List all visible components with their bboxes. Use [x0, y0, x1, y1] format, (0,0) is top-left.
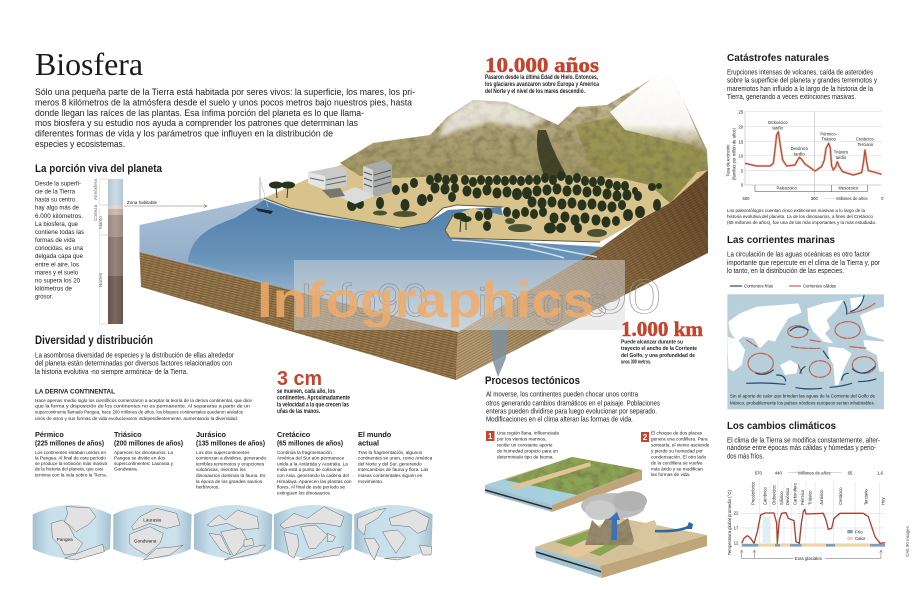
column: Pérmico	[35, 430, 107, 477]
right soil face	[456, 170, 708, 380]
column: Pérmico: de la historia del planeta, que casi	[35, 466, 103, 472]
text block: Al moverse, los continentes pueden chocar unos contra	[486, 390, 638, 399]
panel: diversidad y distribución	[35, 335, 433, 495]
column: Cretácico: unida a la Antártida y Australia. La	[277, 461, 348, 466]
watermark: 90	[594, 271, 661, 324]
deriva text: Hace apenas medio siglo los científicos comenzaron a aceptar la teoría de la deriva continental, que dice	[35, 398, 252, 403]
globe: Triásico: Gondwana	[134, 538, 157, 543]
text block	[486, 390, 660, 423]
chart: global temperature: Devónico	[785, 487, 790, 505]
globe: Triásico	[113, 505, 192, 560]
habitable zone label and arrow	[124, 200, 207, 208]
chart: extinction rate: Terciario	[857, 142, 874, 147]
text block: la historia evolutiva -no siempre armónica- de la Tierra.	[35, 369, 188, 376]
column: Pérmico: la Pangea. Al final de este período	[35, 455, 106, 460]
step 2 text: las formas de vida.	[651, 472, 690, 477]
trees	[347, 171, 662, 237]
chart: global temperature: 17	[734, 525, 739, 530]
chart: extinction rate: Ordovícico	[768, 120, 788, 125]
callout: 10.000 años: 10.000 años	[485, 53, 599, 77]
chart: extinction rate: 10	[739, 153, 744, 158]
chart: global temperature: Silúrico	[779, 491, 784, 505]
chart: extinction rate: Triásico	[834, 150, 849, 155]
chart: global temperature: Cretácico	[838, 487, 843, 505]
globe: actual	[354, 505, 433, 560]
deriva text: que la forma y disposición de los continentes no es permanente. Al separarse a partir de un	[35, 404, 250, 409]
chart: global temperature: Precámbrico	[751, 481, 756, 505]
callout: 10.000 años: los glaciares avanzaron sobre Europa y América	[485, 82, 600, 88]
deriva text: supercontinente llamado Pangea, hace 200 millones de años, los bloques continentales quedaron aislados	[35, 410, 244, 415]
chart: extinction rate: Millones de años	[836, 196, 868, 201]
panel: los cambios climáticos	[727, 420, 886, 561]
column: Cretácico: Himalaya. Aparecen las plantas con	[277, 479, 352, 484]
panel: la porción viva del planeta	[35, 163, 163, 324]
globe: Pérmico: Pangea	[57, 537, 73, 542]
column: Jurásico: dinosaurios dominan la fauna. Es	[196, 473, 266, 478]
chart: extinction rate: 0	[741, 183, 744, 188]
badge 1: 1	[488, 432, 493, 441]
chart: global temperature: Millones de años	[798, 470, 831, 475]
step 2 text: sortearla, el viento asciende	[651, 443, 710, 448]
sea deep	[188, 200, 602, 332]
heading: Los cambios climáticos	[727, 420, 836, 432]
globe: Jurásico	[194, 505, 272, 560]
column: Triásico: supercontinentes: Laurasia y	[114, 461, 174, 466]
column: El mundo actual: El mundo	[358, 430, 392, 439]
chart: extinction rate: 5	[741, 168, 744, 173]
callout: 3 cm	[277, 367, 351, 415]
legend	[730, 284, 837, 290]
text block	[727, 438, 881, 460]
text block: hay algo más de	[35, 205, 79, 212]
chart: global temperature: 12	[734, 541, 739, 546]
text block: La asombrosa diversidad de especies y la distribución de ellas alrededor	[35, 352, 235, 360]
step 1 text: por los vientos marinos,	[497, 436, 547, 441]
step 1 text: Una región llana, influenciada	[497, 431, 559, 436]
chart: global temperature: Terciario	[863, 489, 868, 505]
column: Cretácico: Cretácico	[277, 430, 311, 439]
column: Pérmico: se produce la extinción más masiva	[35, 461, 107, 466]
text block: maremotos han influido a lo largo de la historia de la	[727, 86, 873, 93]
deriva text	[35, 398, 252, 421]
habitable zone label and arrow: Zona habitable	[127, 200, 157, 206]
callout: 3 cm: uñas de las manos.	[277, 409, 320, 415]
column: El mundo actual: Tras la fragmentación, algunos	[358, 450, 423, 455]
badge 1	[486, 431, 494, 441]
globe: Triásico: Laurasia	[143, 518, 162, 523]
text block: Erupciones intensas de volcanes, caída de asteroides	[727, 70, 873, 76]
sailing boat	[255, 177, 273, 214]
footnote: historia evolutiva del planeta. La de los dinosaurios, a fines del Cretácico	[727, 214, 873, 220]
shore foam	[264, 199, 597, 258]
chart: global temperature: Jurásico	[819, 489, 824, 505]
chart: global temperature: Frío	[855, 529, 863, 534]
column: El mundo actual: movimiento.	[358, 479, 383, 484]
intro text	[35, 87, 415, 149]
column: Jurásico: la época de los grandes saurios	[196, 479, 263, 484]
column: Jurásico: terribles terremotos y erupciones	[196, 461, 265, 466]
earth layers column	[93, 179, 123, 324]
front soil face	[140, 252, 458, 380]
mountain	[340, 70, 708, 203]
chart: extinction rate: Paleozoico	[776, 186, 798, 191]
footnote: Los paleontólogos cuentan cinco extinciones masivas a lo largo de la	[727, 208, 865, 214]
callout: 1.000 km	[621, 317, 703, 366]
column: El mundo actual: actual	[358, 438, 379, 448]
globe: Pérmico	[33, 505, 111, 560]
text block: importante que repercute en el clima de la Tierra y, por	[727, 260, 881, 267]
step 2 text	[651, 431, 710, 477]
column: Triásico: (200 millones de años)	[114, 438, 184, 448]
chart: global temperature: Eras glaciales	[795, 556, 822, 561]
diagram: flat land block	[485, 457, 642, 512]
text block: sobre la superficie del planeta y grandes terremotos y	[727, 78, 877, 84]
chart: extinction rate: Cretácico-	[856, 137, 875, 142]
text block: lo tanto, en la distribución de las especies.	[727, 268, 844, 275]
chart: extinction rate: 25	[739, 109, 744, 114]
column: Triásico	[114, 430, 184, 472]
chart: extinction rate: Triásico	[821, 137, 837, 142]
column: Triásico: Aparecen los dinosaurios. La	[114, 450, 173, 455]
step 1 text: determinado tipo de bioma.	[497, 454, 554, 459]
column: Jurásico: (135 millones de años)	[196, 438, 266, 448]
callout: 10.000 años: del Norte y el nivel de los mares descendió.	[485, 89, 585, 95]
text block	[727, 252, 881, 275]
chart: global temperature: Hoy	[881, 497, 886, 505]
chart: extinction rate: 300	[811, 196, 818, 201]
column: Cretácico: (65 millones de años)	[277, 438, 343, 448]
map row: continental drift globes	[33, 505, 433, 560]
globe: Cretácico	[274, 505, 352, 560]
chart: extinction rate: Devónico	[791, 146, 809, 151]
map: ocean currents: México, probablemente los países nórdicos europeos serían inhabitables.	[730, 400, 875, 405]
earth layers column: Atmósfera	[93, 179, 98, 200]
panel: procesos tectónicos	[485, 375, 710, 578]
step 2 text: El choque de dos placas	[651, 431, 703, 436]
text block: Desde la superfi-	[35, 180, 81, 188]
watermark	[257, 260, 661, 330]
column: Jurásico: Jurásico	[196, 430, 227, 439]
column: Cretácico: flores. Al final de este período se	[277, 485, 345, 490]
chart: extinction rate	[726, 109, 884, 201]
chart: extinction rate: Mesozoico	[838, 186, 859, 191]
column: Cretácico: India está a punto de colisionar	[277, 467, 342, 472]
column: Pérmico: Pérmico	[35, 430, 64, 439]
column: Cretácico: Continúa la fragmentación.	[277, 450, 333, 455]
chart: extinction rate: 20	[739, 124, 744, 129]
callout: 1.000 km: Puede alcanzar durante su	[621, 340, 683, 346]
text block: formas de vida	[35, 237, 75, 244]
column: Cretácico	[277, 430, 352, 495]
chart: extinction rate: Pérmico-	[820, 131, 838, 136]
heading: Diversidad y distribución	[35, 335, 153, 347]
step 2 text: y pierde su humedad por	[651, 449, 703, 454]
chart: global temperature: 22	[734, 511, 739, 516]
column: Pérmico: Los continentes estaban unidos en	[35, 450, 106, 455]
column: Jurásico: Los dos supercontinentes	[196, 450, 250, 455]
column: Jurásico	[196, 430, 266, 490]
text block: El clima de la Tierra se modifica constantemente, alter-	[727, 438, 881, 444]
text block: conocidas, es una	[35, 245, 83, 252]
chart: global temperature: Calor	[855, 536, 866, 541]
column: Triásico: Gondwana.	[114, 466, 138, 472]
heading: Las corrientes marinas	[727, 234, 835, 246]
mountain snow	[438, 70, 704, 148]
text block: del planeta están determinadas por diversos factores relacionados con	[35, 360, 232, 368]
mountain ravine	[537, 130, 568, 178]
chart: extinction rate: 15	[739, 139, 744, 144]
text block: otros generando cambios dramáticos en el paisaje. Poblaciones	[486, 398, 660, 407]
chart: extinction rate: 600	[743, 196, 750, 201]
chart: global temperature: 65	[848, 470, 853, 475]
deriva text: unos de otros y sus formas de vida evolucionaron independientemente, aumentando la diversidad.	[35, 416, 238, 421]
chart: global temperature: Ordovícico	[771, 484, 776, 505]
text block	[35, 352, 235, 376]
heading: La porción viva del planeta	[35, 163, 163, 175]
text block: dos más fríos.	[727, 454, 764, 460]
heading: Procesos tectónicos	[485, 375, 580, 387]
callout: 3 cm: se mueven, cada año, los	[277, 389, 336, 395]
illustration: 3D landscape block	[140, 70, 708, 380]
title: Biosfera	[35, 46, 143, 82]
step 1 text: recibe un constante aporte	[497, 443, 553, 448]
trench in soil	[490, 320, 508, 377]
callout: 10.000 años	[485, 53, 600, 95]
chart: extinction rate: (familias por millón de años)	[731, 127, 736, 180]
chart: global temperature: Carbonífero	[792, 482, 797, 505]
column: Triásico: Triásico	[114, 430, 142, 439]
text block: delgada capa que	[35, 253, 83, 260]
callout: 3 cm: la velocidad a la que crecen las	[277, 402, 350, 408]
text block: kilómetros de	[35, 285, 72, 292]
callout: 1.000 km: unos 300 metros.	[621, 360, 651, 366]
step 2 text: genera una cordillera. Para	[651, 437, 708, 442]
map: ocean currents: Sin el aporte de calor que brindan las aguas de la Corriente del Golfo de	[730, 393, 875, 398]
panel: catástrofes naturales	[726, 52, 884, 226]
column: El mundo actual: del Norte y del Sur, generando	[358, 461, 422, 466]
chart: extinction rate: tardío	[836, 155, 847, 160]
chart: global temperature: Temperatura global promedio (°C)	[727, 490, 732, 555]
column: Cretácico: con Asia, generando la cadena del	[277, 473, 349, 478]
column: El mundo actual	[358, 430, 433, 484]
text block: La circulación de las aguas oceánicas es otro factor	[727, 252, 871, 258]
callout: 1.000 km: del Golfo, y una profundidad de	[621, 353, 695, 359]
intro text: donde llegan las raíces de las plantas. Esa ínfima porción del planeta es lo que llama-	[35, 108, 364, 118]
text block: La biosfera, que	[35, 221, 78, 228]
column: Jurásico: volcánicas, mientras los	[196, 467, 246, 472]
text block	[35, 180, 85, 300]
chart: global temperature: Pérmico	[800, 489, 805, 505]
intro text: especies y ecosistemas.	[35, 139, 125, 149]
column: Triásico: Pangea se divide en dos	[114, 455, 166, 460]
map: ocean currents	[727, 294, 884, 409]
text block: entre el aire, los	[35, 261, 80, 268]
text block: cie de la Tierra	[35, 188, 75, 196]
buildings	[308, 160, 392, 204]
column: El mundo actual: continentes se unen, como América	[358, 456, 433, 461]
footnote	[727, 208, 876, 226]
text block: Modificaciones en el clima alteran las formas de vida.	[486, 414, 633, 423]
callout: 3 cm: 3 cm	[277, 367, 322, 390]
text block: contiene todas las	[35, 229, 85, 236]
earth layers column: Manto	[98, 216, 103, 229]
intro text: meros 8 kilómetros de la atmósfera desde el suelo y unos pocos metros bajo nuestros pies, hasta	[35, 98, 412, 108]
column: El mundo actual: intercambios de fauna y flora. Las	[358, 467, 429, 472]
callout: 3 cm: continentes. Aproximadamente	[277, 396, 351, 402]
text block	[727, 70, 877, 101]
chart: global temperature: Cámbrico	[762, 487, 767, 505]
credit: ©Alt 90 Images	[904, 525, 910, 557]
badge 2	[641, 432, 649, 442]
callout: 10.000 años: Pasaron desde la última Edad de Hielo. Entonces,	[485, 75, 598, 81]
text block: enteras pueden dividirse para luego evolucionar por separado.	[486, 406, 657, 415]
chart: global temperature: Triásico	[807, 490, 812, 505]
text block: 6.000 kilómetros.	[35, 213, 83, 220]
footnote: (65 millones de años), fue una de las más importantes y la más estudiada.	[727, 220, 876, 226]
palm trees	[270, 182, 471, 232]
column: El mundo actual: masas continentales siguen en	[358, 473, 423, 478]
text block: nándose entre épocas más cálidas y húmedas y perio-	[727, 445, 877, 452]
column: Pérmico: termina con la vida sobre la Tierra.	[35, 472, 107, 477]
step 2 text: de la cordillera se vuelve	[651, 460, 703, 465]
badge 2: 2	[643, 433, 648, 442]
chart: global temperature: 1,6	[877, 470, 884, 475]
column: Jurásico: herbívoros.	[196, 485, 219, 490]
chart: global temperature	[727, 470, 886, 561]
step 2 text: más árido y se modifican	[651, 466, 703, 471]
column: Cretácico: América del Sur aún permanece	[277, 456, 345, 461]
text block: grosor.	[35, 294, 53, 300]
earth layers column: Núcleo	[98, 272, 103, 287]
callout: 1.000 km: trayecto el ancho de la Corriente	[621, 346, 697, 352]
intro text: Sólo una pequeña parte de la Tierra está habitada por seres vivos: la superficie, los mares, los pri-	[35, 87, 415, 97]
watermark: images	[478, 281, 607, 325]
heading: Catástrofes naturales	[727, 52, 829, 64]
text block: no supera los 20	[35, 277, 80, 284]
callout: 1.000 km: 1.000 km	[621, 317, 703, 341]
land	[264, 160, 708, 242]
step 1 text	[497, 431, 559, 459]
text block: hasta su centro	[35, 197, 75, 204]
watermark: Infographics	[257, 272, 594, 328]
column: Jurásico: comienzan a dividirse, generando	[196, 456, 266, 461]
chart: extinction rate: 0	[881, 196, 884, 201]
panel: las corrientes marinas	[727, 234, 884, 409]
step 2 text: condensación. El otro lado	[651, 454, 707, 459]
intro text: diferentes formas de vida y los parámetros que influyen en la distribución de	[35, 128, 333, 138]
diagram: mountain block	[535, 491, 707, 578]
sea shallow	[140, 198, 602, 332]
text block: Tierra, generando a veces extinciones masivas.	[727, 94, 856, 101]
legend: Corrientes cálidas	[803, 284, 837, 290]
earth layers column: Corteza	[93, 204, 98, 221]
chart: global temperature: 570	[755, 470, 763, 475]
column: Cretácico: extinguen los dinosaurios.	[277, 490, 331, 495]
chart: global temperature: 440	[775, 470, 783, 475]
legend: Corrientes frías	[744, 284, 774, 290]
intro text: mos biosfera y su estudio nos ayuda a comprender los patrones que determinan las	[35, 118, 359, 128]
text block: mares y el suelo	[35, 269, 78, 276]
column: Pérmico: (225 millones de años)	[35, 438, 105, 448]
watermark: Info90	[300, 274, 428, 326]
chart: extinction rate: tardío	[772, 125, 784, 130]
step 1 text: de humedad propicio para un	[497, 448, 558, 453]
chart: extinction rate: Tasa de extinción	[726, 144, 731, 177]
subheading: la deriva continental: LA DERIVA CONTINENTAL	[35, 388, 115, 396]
chart: extinction rate: tardío	[794, 151, 805, 156]
